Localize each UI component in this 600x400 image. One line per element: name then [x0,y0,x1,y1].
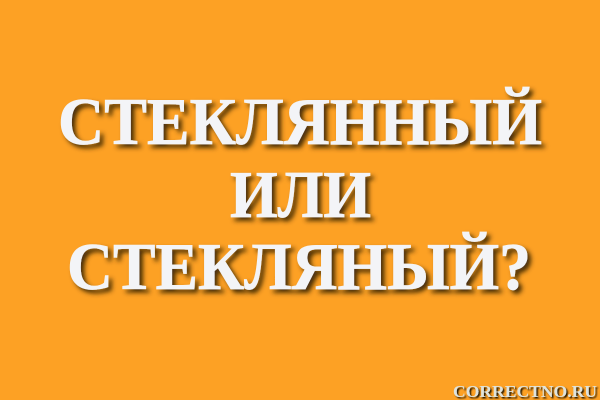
heading line 3: СТЕКЛЯНЫЙ? [67,230,531,304]
heading line 1: СТЕКЛЯННЫЙ [58,85,542,159]
heading line 2: ИЛИ [230,158,371,232]
